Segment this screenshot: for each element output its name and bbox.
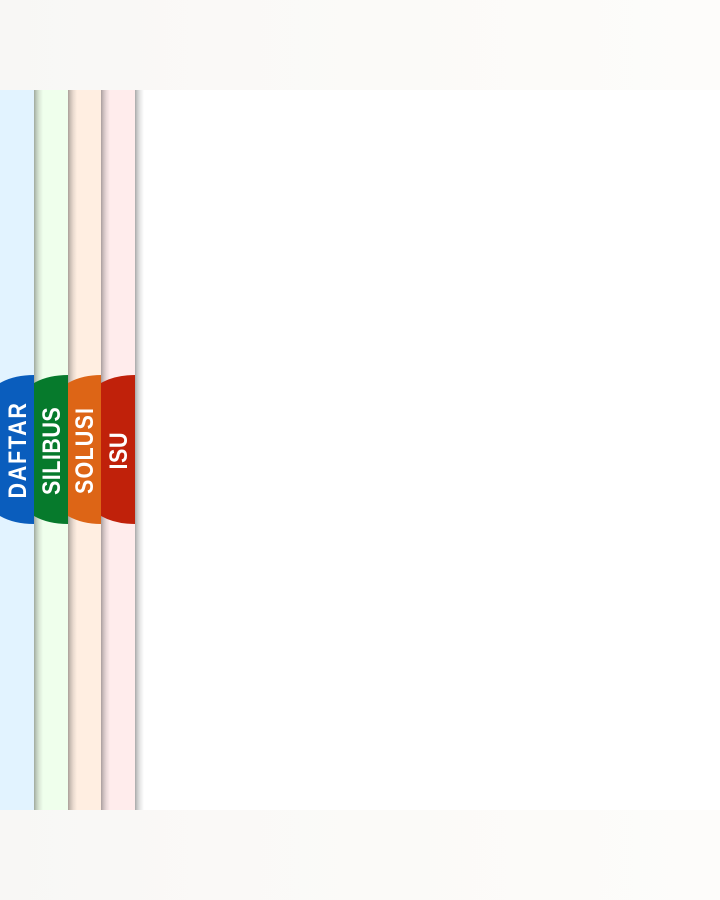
bottom band bbox=[0, 810, 720, 900]
tab: daftar bbox=[0, 375, 34, 524]
panel: daftar bbox=[0, 90, 34, 810]
tab: isu bbox=[101, 375, 135, 524]
label: solusi: SOLUSI bbox=[70, 408, 98, 494]
panel: silibus bbox=[34, 90, 68, 810]
label: isu: ISU bbox=[104, 433, 132, 470]
label: daftar: DAFTAR bbox=[3, 403, 31, 498]
label: silibus: SILIBUS bbox=[37, 407, 65, 495]
tab: solusi bbox=[68, 375, 101, 524]
top band bbox=[0, 0, 720, 90]
panel: isu bbox=[101, 90, 135, 810]
panel: solusi bbox=[68, 90, 101, 810]
tab: silibus bbox=[34, 375, 68, 524]
